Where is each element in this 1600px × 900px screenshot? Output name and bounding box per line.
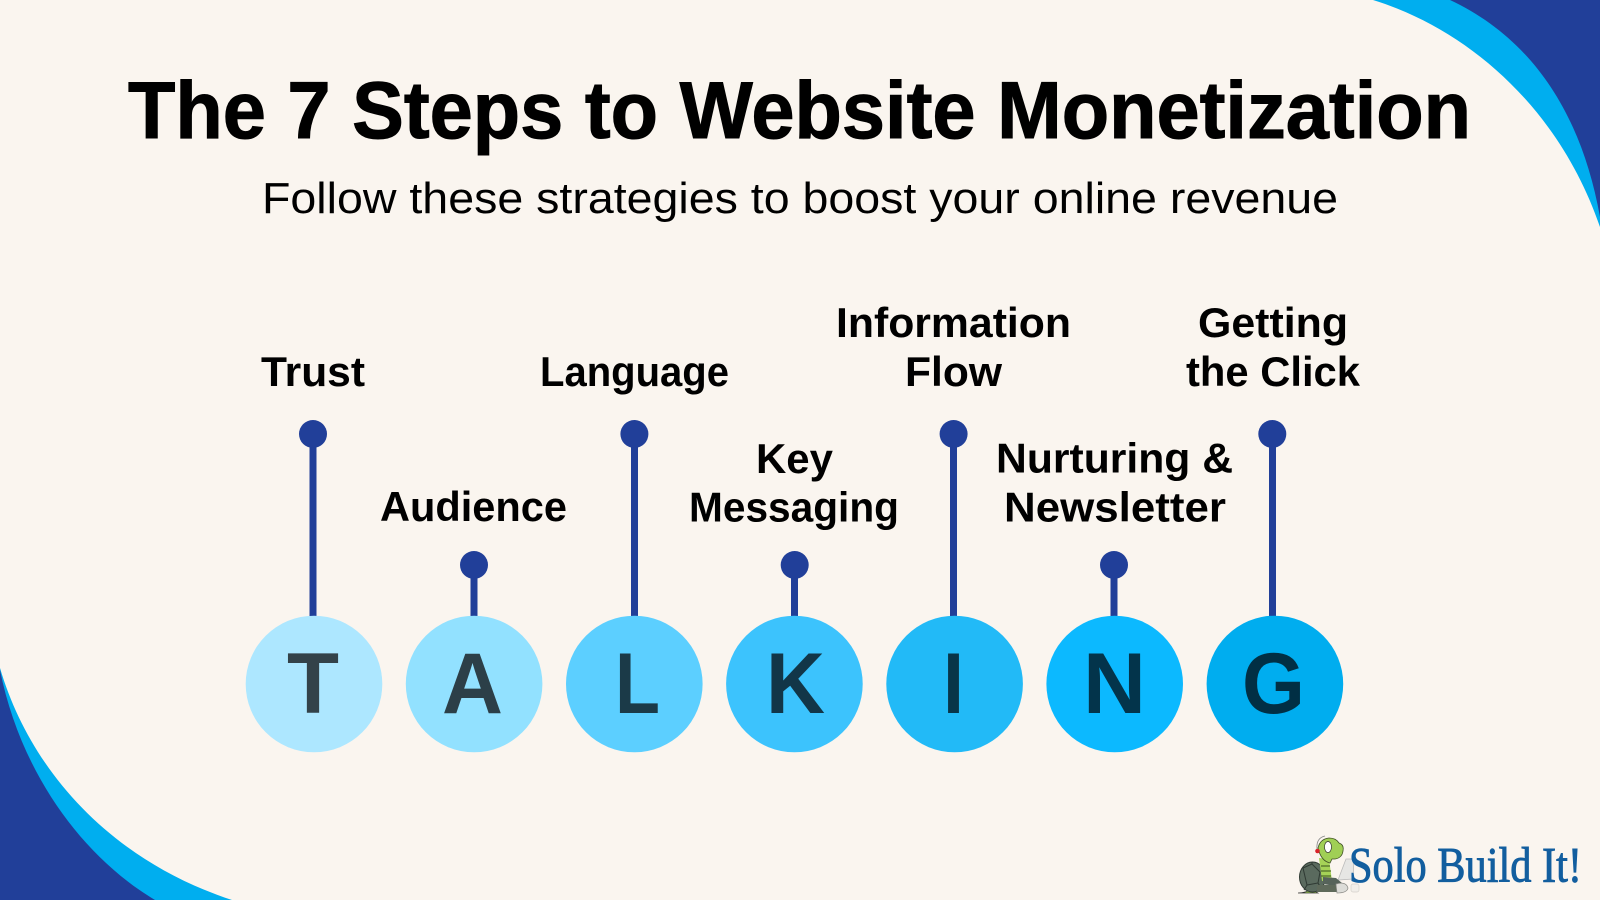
label: Getting the Click: Getting (1198, 299, 1348, 346)
icon: turtle with laptop (1298, 836, 1359, 893)
step L: Language (540, 348, 729, 752)
circle letter K: K (766, 636, 825, 732)
circle letter A: A (442, 636, 503, 732)
label: Getting the Click: the Click (1186, 348, 1361, 395)
circle letter G: G (1242, 636, 1305, 732)
label: Audience: Audience (380, 483, 567, 530)
label: Key Messaging (689, 435, 899, 530)
circle letter A (406, 616, 542, 752)
label: Key Messaging: Messaging (689, 484, 899, 530)
circle letter L (566, 616, 703, 752)
label: Information Flow: Flow (905, 348, 1002, 395)
step T: Trust (246, 348, 382, 752)
corner decoration: top right (1373, 0, 1600, 227)
label: Information Flow (836, 299, 1071, 395)
label: Nurturing & Newsletter: Newsletter (1004, 484, 1226, 530)
label: Nurturing & Newsletter (996, 434, 1233, 530)
connector with dot (1258, 420, 1286, 619)
connector with dot (620, 420, 648, 619)
corner decoration: bottom left (0, 668, 232, 900)
circle letter N: N (1083, 636, 1146, 732)
step K: Key Messaging (689, 435, 899, 752)
label: Trust: Trust (261, 348, 365, 395)
circle letter L: L (615, 636, 660, 732)
connector with dot (781, 551, 809, 619)
connector with dot (940, 420, 968, 619)
circle letter G (1207, 616, 1343, 752)
connector with dot (460, 551, 488, 619)
circle letter T: T (287, 636, 339, 732)
circle letter N (1046, 616, 1183, 752)
circle letter I (886, 616, 1023, 752)
step G: Getting the Click (1186, 299, 1361, 752)
label: Information Flow: Information (836, 299, 1071, 346)
label: Nurturing & Newsletter: Nurturing & (996, 434, 1233, 482)
title: The 7 Steps to Website Monetization (128, 66, 1471, 156)
step I: Information Flow (836, 299, 1071, 752)
logo: Solo Build It! (1298, 836, 1582, 893)
label: Language: Language (540, 348, 729, 395)
subtitle: Follow these strategies to boost your online revenue (262, 174, 1338, 223)
step N: Nurturing & Newsletter (996, 434, 1233, 752)
circle letter K (726, 616, 863, 752)
connector with dot (299, 420, 327, 619)
circle letter I: I (943, 636, 964, 732)
step A: Audience (380, 483, 567, 752)
circle letter T (246, 616, 382, 752)
label: Key Messaging: Key (756, 435, 834, 482)
label: Getting the Click (1186, 299, 1361, 395)
connector with dot (1100, 551, 1128, 619)
